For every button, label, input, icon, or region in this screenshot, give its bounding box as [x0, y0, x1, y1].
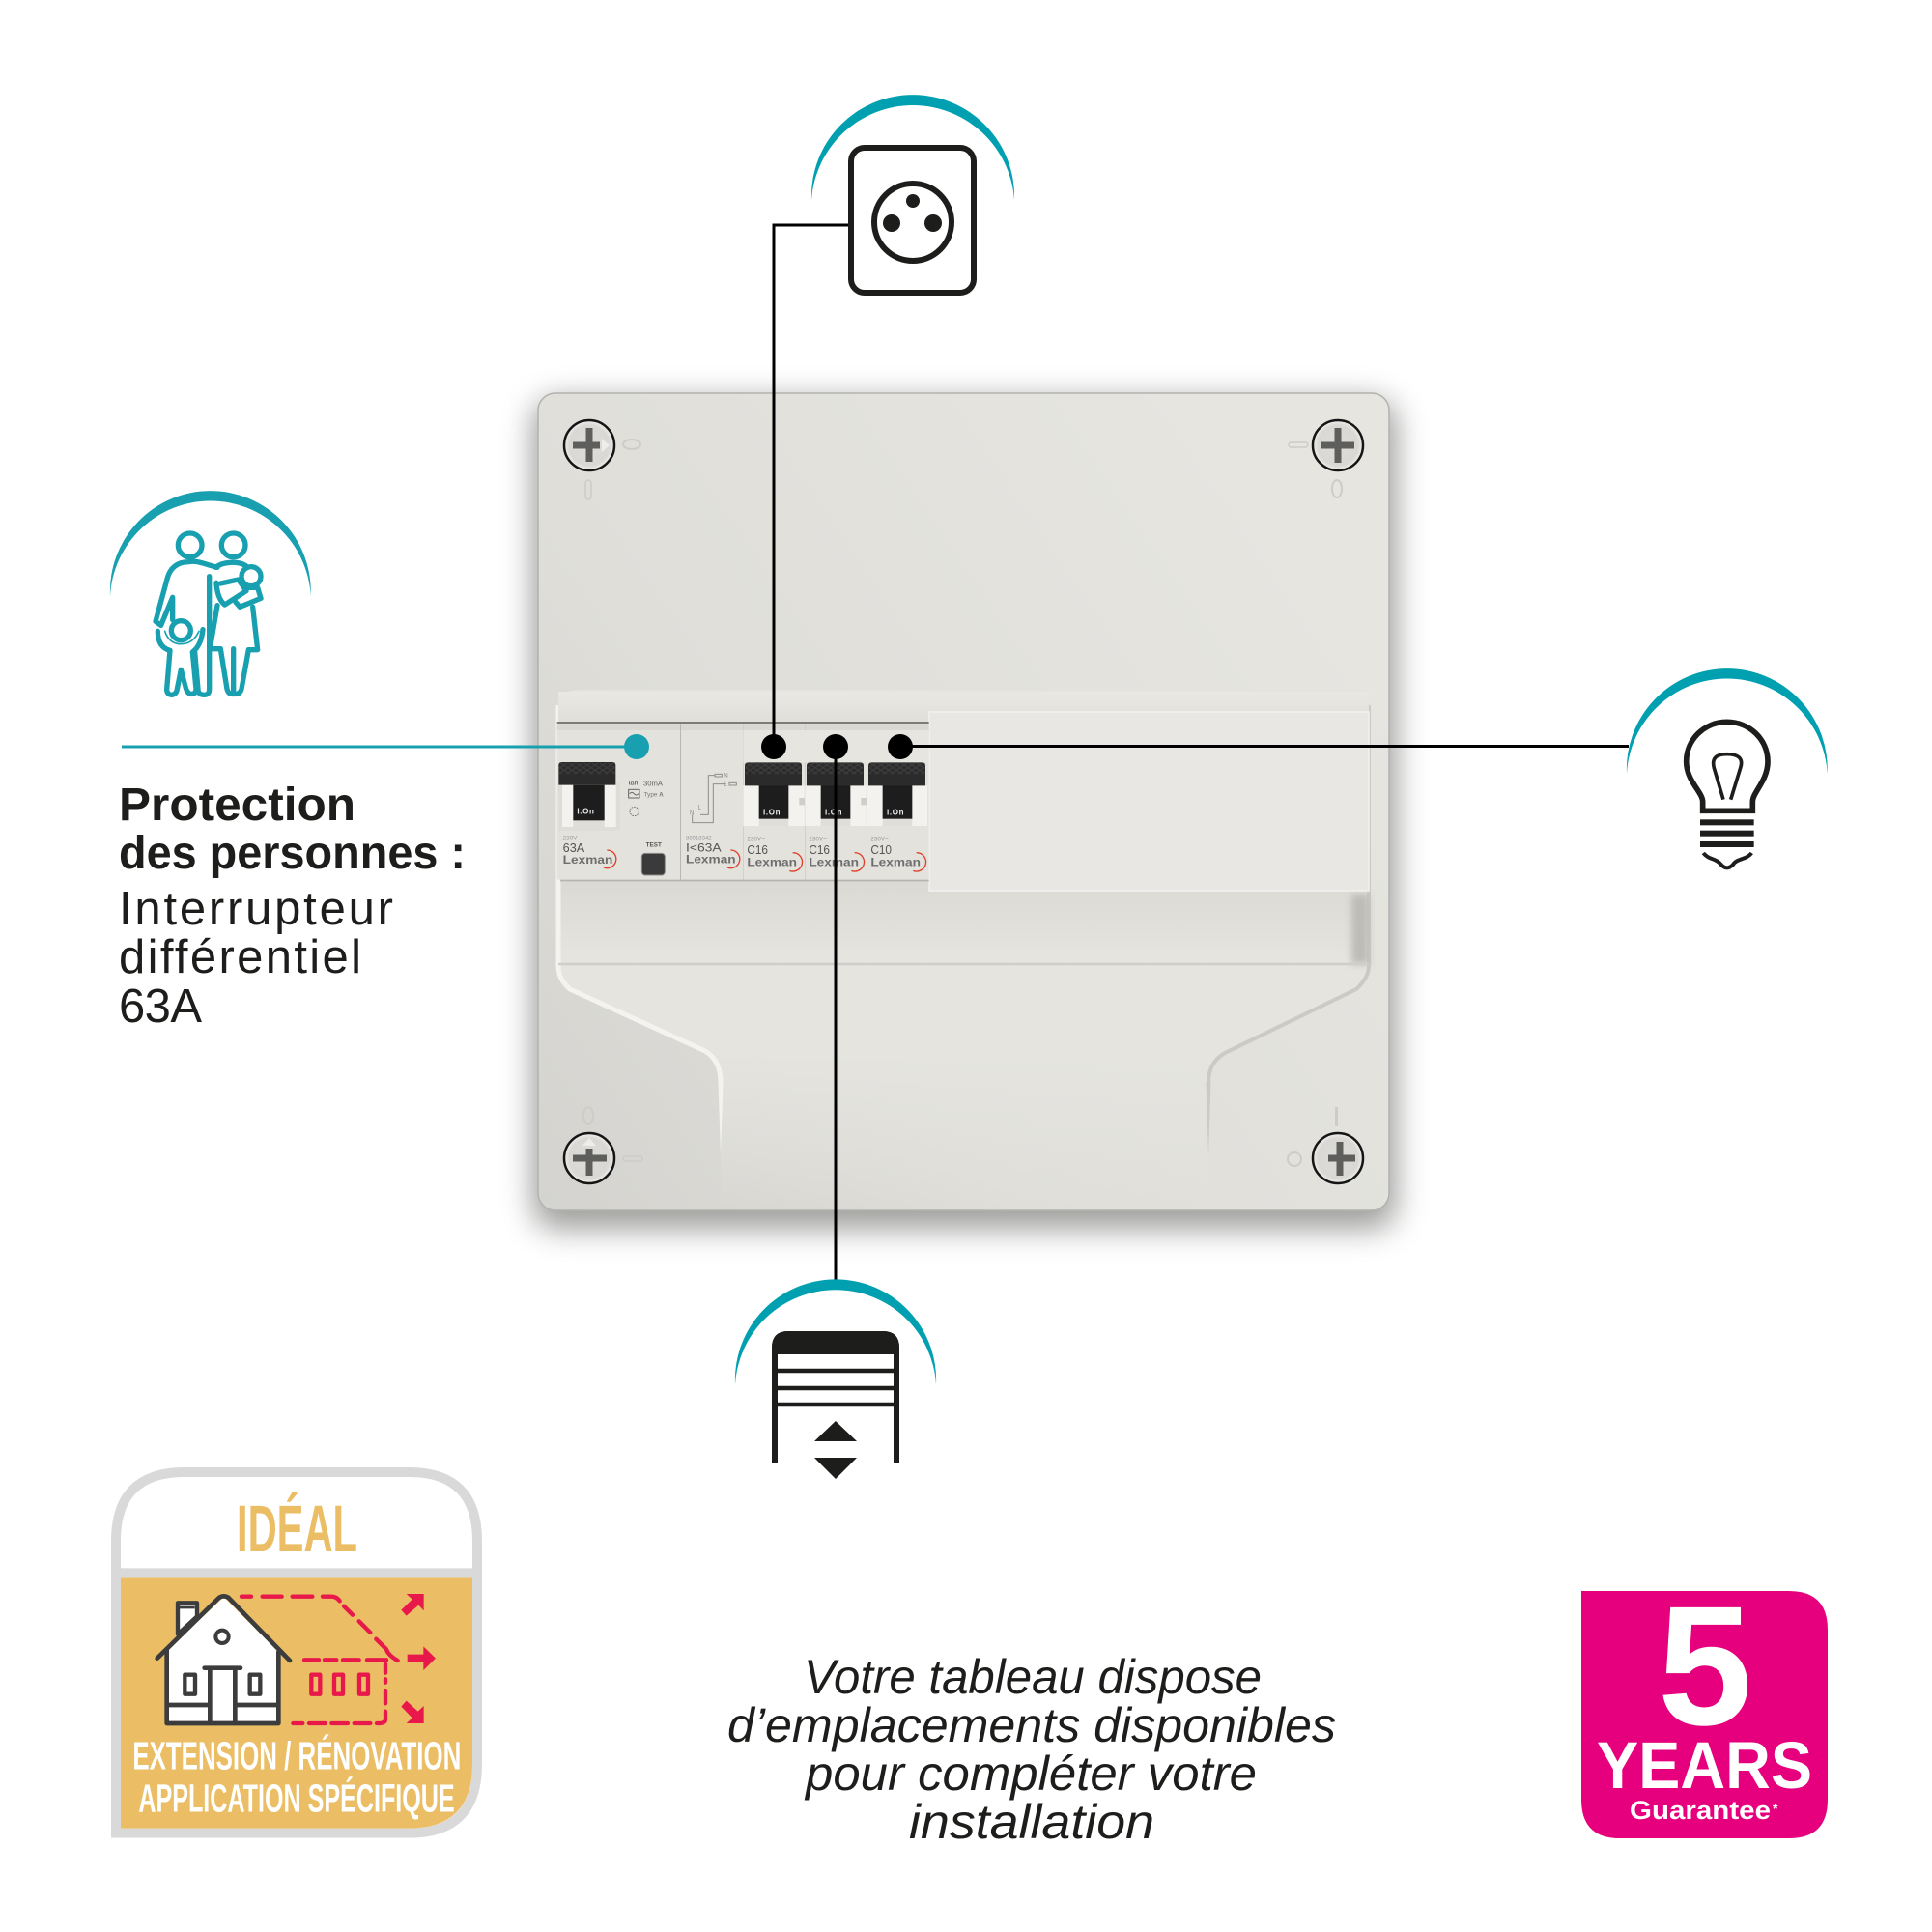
badge text	[132, 1734, 461, 1821]
badge title: IDÉAL	[237, 1492, 357, 1566]
text: protection des personnes	[119, 780, 466, 1033]
connector: protection line	[122, 734, 649, 759]
module: 63A differential switch: TEST	[646, 842, 662, 849]
text: protection des personnes: Interrupteur	[119, 883, 393, 935]
text: available slots note: pour compléter votre	[804, 1747, 1257, 1801]
connector: socket line	[761, 225, 850, 759]
module: 63A differential switch	[558, 762, 665, 875]
module: 63A neutral: N	[724, 774, 728, 780]
module: C16 breaker: C16	[747, 842, 768, 857]
text: available slots note: installation	[909, 1795, 1154, 1849]
badge: 5 years guarantee: 5	[1658, 1572, 1752, 1761]
module: C10 breaker: 230V~	[870, 837, 889, 843]
text: available slots note	[727, 1650, 1336, 1849]
text: available slots note: Votre tableau dispose	[804, 1650, 1262, 1704]
module: 63A neutral: N	[690, 810, 694, 816]
module: 63A neutral: I<63A	[686, 840, 722, 854]
badge: 5 years guarantee: Guarantee	[1630, 1796, 1771, 1825]
text: protection des personnes: différentiel	[119, 931, 361, 983]
module: 63A differential switch: I.On	[577, 807, 595, 815]
module: second C16 breaker: 230V~	[809, 837, 827, 843]
connector: lighting line	[888, 734, 1629, 759]
badge: 5 years guarantee: YEARS	[1597, 1728, 1812, 1803]
screw: bottom left	[564, 1107, 642, 1183]
module: C10 breaker	[867, 762, 927, 871]
icon: house with extension	[157, 1594, 436, 1723]
icon: roller shutter	[735, 1279, 936, 1479]
screw: top left	[564, 420, 640, 499]
module: 63A differential switch: Lexman	[563, 853, 612, 867]
badge: 5 years guarantee	[1581, 1572, 1828, 1838]
module: C10 breaker: Lexman	[870, 856, 921, 869]
module: second C16 breaker	[805, 762, 871, 871]
module: second C16 breaker: Lexman	[809, 856, 859, 869]
module: second C16 breaker: I.On	[825, 808, 842, 816]
module: C16 breaker: I.On	[763, 808, 781, 816]
text: protection des personnes: des personnes :	[119, 828, 466, 879]
screw: bottom right	[1288, 1107, 1363, 1183]
module: 63A differential switch: 63A	[563, 841, 585, 855]
module: 63A differential switch: 230V~	[563, 835, 581, 841]
module: C16 breaker: 230V~	[747, 837, 765, 843]
module: 63A neutral: Lexman	[686, 852, 736, 866]
module: 63A differential switch: IΔn	[629, 781, 639, 787]
badge: ideal extension renovation	[116, 1472, 477, 1833]
screw: top right	[1289, 420, 1363, 497]
badge text: EXTENSION / RÉNOVATION	[132, 1734, 461, 1778]
icon: light bulb	[1627, 668, 1828, 867]
text: protection des personnes: 63A	[119, 980, 202, 1033]
breakers row	[557, 722, 929, 881]
panel: blank cover	[929, 712, 1369, 891]
module: 63A neutral: L	[724, 782, 727, 788]
text: available slots note: d’emplacements disponibles	[727, 1698, 1336, 1752]
icon: family	[110, 491, 311, 695]
panel: electrical board	[533, 393, 1396, 1229]
module: second C16 breaker: C16	[809, 842, 830, 857]
module: C16 breaker	[743, 762, 810, 871]
text: protection des personnes: Protection	[119, 780, 355, 831]
module: C10 breaker: C10	[870, 842, 892, 857]
module: 63A neutral: L	[698, 805, 702, 810]
module: 63A differential switch: 30mA	[643, 779, 664, 787]
module: 63A differential switch: Type A	[644, 791, 664, 798]
module: 63A neutral: 88918342	[686, 836, 712, 841]
icon: socket	[811, 95, 1014, 293]
module: 63A neutral	[686, 774, 740, 868]
module: C10 breaker: I.On	[887, 808, 904, 816]
badge text: APPLICATION SPÉCIFIQUE	[138, 1776, 455, 1821]
module: C16 breaker: Lexman	[747, 856, 797, 869]
badge: 5 years guarantee: *	[1773, 1801, 1778, 1816]
connector: roller shutter line	[823, 734, 848, 1281]
